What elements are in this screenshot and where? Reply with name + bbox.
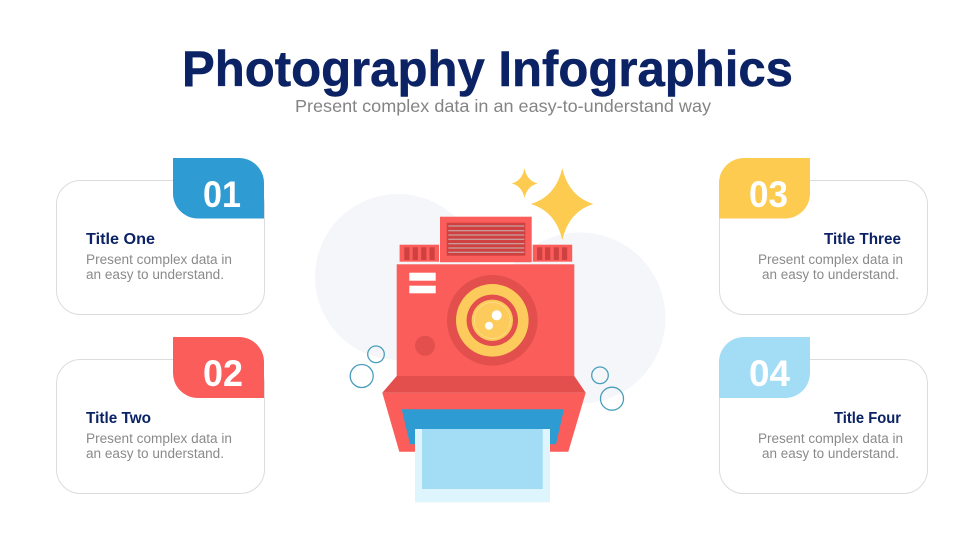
badge 03 (719, 158, 810, 218)
text: card 03 body (758, 252, 903, 282)
icon: bubbles (350, 346, 624, 410)
panel: card 04 (719, 337, 928, 494)
heading: title two: Title Two (86, 410, 151, 427)
camera body (397, 264, 574, 377)
icon: instant camera (382, 217, 586, 502)
text: card 03 body: Present complex data in (758, 252, 903, 267)
text: card 02 body (86, 431, 232, 461)
printed photo (415, 429, 550, 502)
title: Photography Infographics (182, 41, 793, 97)
badge 04 (719, 337, 810, 398)
text: card 02 body: an easy to understand. (86, 446, 224, 461)
badge 02 (173, 337, 264, 398)
badge 01: 01 (203, 174, 241, 215)
badge 02: 02 (203, 353, 243, 394)
panel: card 01 (56, 158, 264, 314)
shutter button (415, 336, 435, 356)
text: card 01 body (86, 252, 232, 282)
viewfinder marks (409, 273, 436, 293)
icon: sparkles (512, 168, 593, 240)
text: card 04 body: Present complex data in (758, 431, 903, 446)
heading: title one: Title One (86, 231, 155, 248)
subtitle: Present complex data in an easy-to-understand way (295, 96, 711, 116)
panel: card 02 (56, 337, 264, 494)
text: card 04 body (758, 431, 903, 461)
heading: title three: Title Three (824, 231, 901, 248)
badge 03: 03 (749, 174, 788, 215)
panel: card 03 (719, 158, 928, 314)
camera base (382, 376, 586, 452)
camera top vents (400, 245, 572, 262)
badge 01 (173, 158, 264, 218)
text: card 01 body: Present complex data in (86, 252, 232, 267)
heading: title four: Title Four (834, 410, 901, 427)
lens (447, 275, 538, 366)
icon: background blobs (315, 194, 666, 404)
text: card 01 body: an easy to understand. (86, 267, 224, 282)
text: card 04 body: an easy to understand. (762, 446, 899, 461)
badge 04: 04 (749, 353, 790, 394)
camera flash (440, 217, 532, 262)
text: card 02 body: Present complex data in (86, 431, 232, 446)
text: card 03 body: an easy to understand. (762, 267, 899, 282)
